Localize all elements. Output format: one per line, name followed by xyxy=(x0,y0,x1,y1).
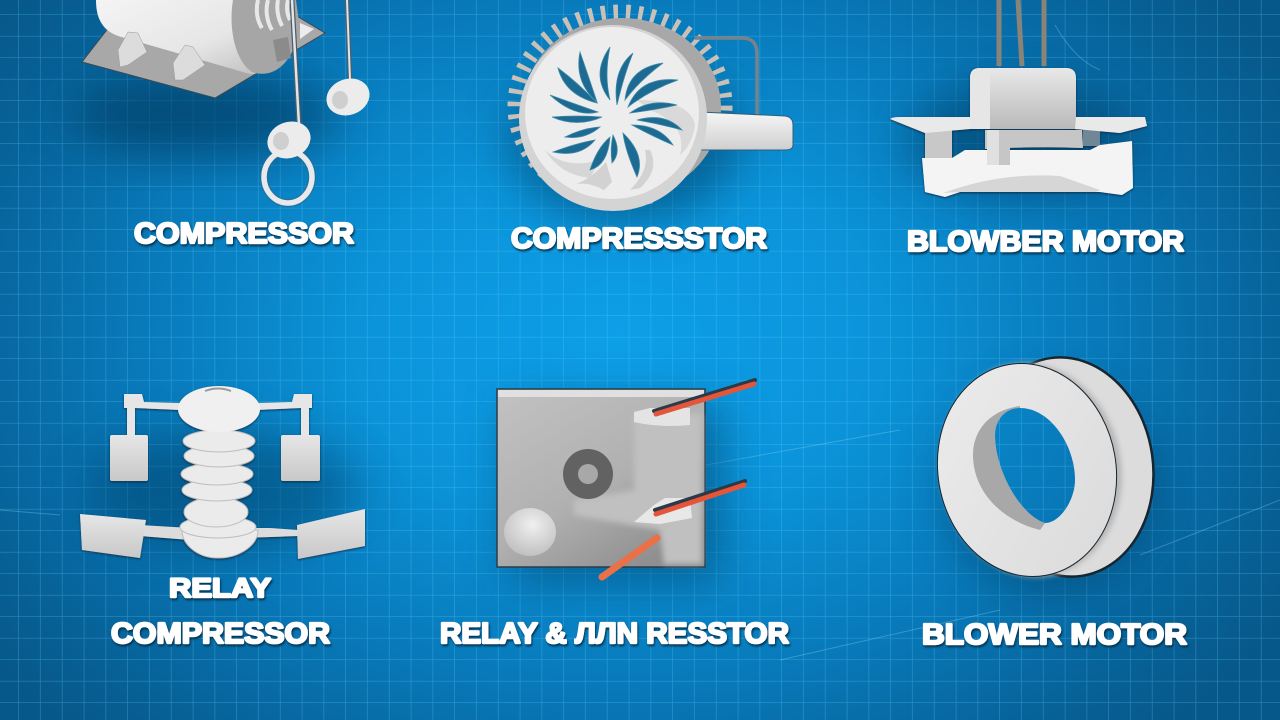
coil stack xyxy=(180,430,258,558)
lower arms xyxy=(140,525,298,540)
fan teeth xyxy=(515,12,725,200)
red wires xyxy=(654,380,755,411)
terminals xyxy=(634,408,690,426)
wires xyxy=(999,0,1044,66)
dial xyxy=(563,449,613,499)
label: compressor bottom: COMPRESSOR xyxy=(111,618,330,650)
blade shadows xyxy=(637,100,695,155)
center tab xyxy=(987,130,1010,165)
icon: compressor motor xyxy=(70,0,375,203)
plate xyxy=(497,389,705,567)
lower legs xyxy=(925,130,952,158)
base plate xyxy=(82,0,325,98)
ring front xyxy=(936,363,1118,577)
label: compressstor: COMPRESSSTOR xyxy=(511,223,767,255)
icon: relay coil xyxy=(80,386,365,559)
flange xyxy=(890,100,1147,133)
icon: relay and resistor plate xyxy=(497,380,755,580)
ring inner wall xyxy=(973,406,1045,530)
icon: blower motor housing xyxy=(890,0,1147,197)
lower blocks xyxy=(80,514,146,558)
upper arms xyxy=(124,394,180,436)
groove shadow xyxy=(936,359,1124,581)
label: blower motor top: BLOWBER MOTOR xyxy=(907,226,1184,258)
inner band xyxy=(985,130,1083,149)
icon: compressor fan xyxy=(510,12,793,220)
disc xyxy=(519,25,707,211)
top block xyxy=(970,68,1076,129)
top dome xyxy=(178,386,260,432)
wires and terminals xyxy=(292,0,299,125)
icon: ring xyxy=(921,346,1167,591)
motor feet xyxy=(118,32,147,67)
ring back xyxy=(1029,356,1155,578)
label: relay and resistor: RELAY & ЛЛN RESSTOR xyxy=(440,618,789,650)
label: compressor: COMPRESSOR xyxy=(134,218,354,250)
motor cylinder xyxy=(96,0,272,74)
label: blower motor bottom: BLOWER MOTOR xyxy=(922,619,1187,651)
fan blades xyxy=(550,47,682,177)
label: relay: RELAY xyxy=(169,573,271,603)
outlet pipe xyxy=(700,112,793,150)
upper blocks xyxy=(110,435,148,481)
wire loop xyxy=(695,38,757,115)
knob xyxy=(504,508,556,556)
